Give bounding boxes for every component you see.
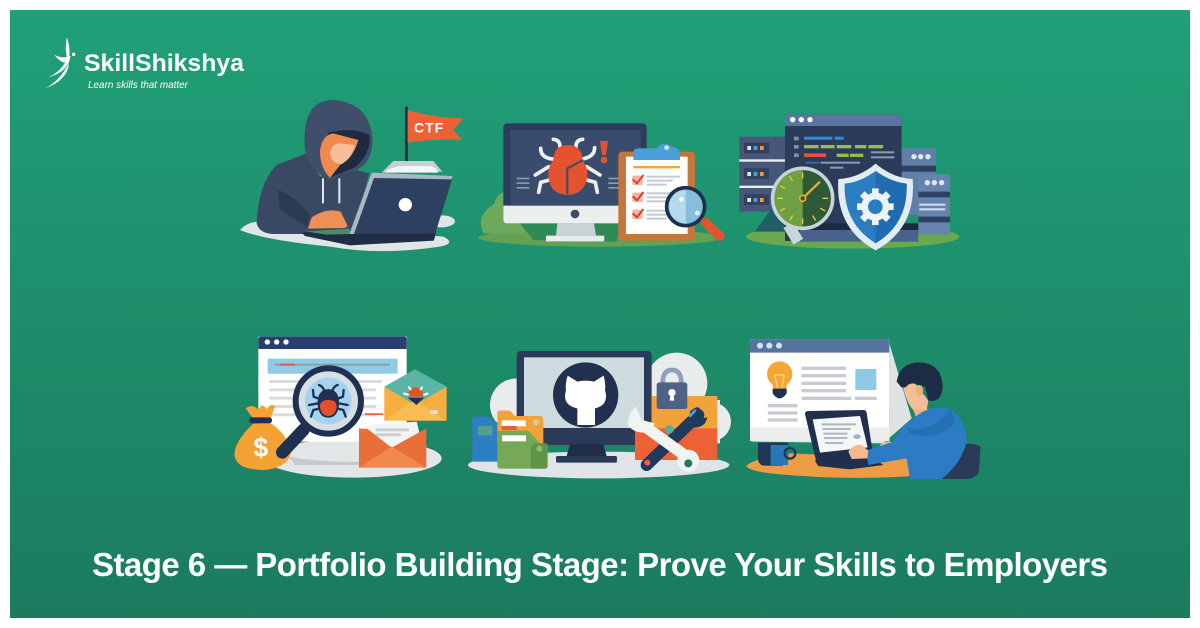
icon: shield with gear: [838, 164, 913, 250]
icon: bug: [535, 139, 608, 195]
clipboard checklist: [618, 144, 695, 241]
server rack: [739, 137, 789, 212]
window shadow: [750, 343, 912, 443]
flag: [405, 107, 463, 162]
folders: [472, 411, 548, 469]
illustration: bug bounty window, money bag and envelopes: [234, 337, 447, 478]
icon: lower envelope: [359, 422, 426, 468]
illustration: bug on monitor with checklist: [478, 123, 722, 247]
illustration: code window, gauge and shield: [739, 114, 959, 250]
hooded figure: [257, 100, 373, 234]
icon: GitHub octocat: [553, 362, 618, 428]
icon: leaping figure: [44, 37, 75, 89]
illustration: developer at laptop with browser window: [746, 339, 981, 479]
cloud: [490, 353, 731, 443]
icon: money bag: $: [253, 433, 268, 463]
icon: crossed wrenches: [628, 407, 707, 472]
icon: magnifying glass with bug: [282, 368, 361, 452]
icon: magnifying glass: [667, 188, 720, 236]
logo: SkillShikshya: [44, 37, 244, 91]
illustration: GitHub monitor with tools: [468, 351, 731, 478]
icon: open envelope with bug: [384, 369, 447, 421]
laptop: [302, 173, 453, 245]
right servers: [897, 148, 950, 234]
icon: gauge magnifier: [773, 168, 833, 242]
logo tagline: Learn skills that matter: [88, 79, 188, 91]
logo wordmark: SkillShikshya: [84, 50, 244, 77]
browser window: [750, 339, 889, 441]
flag: CTF: [414, 119, 444, 135]
person: [848, 362, 981, 479]
coffee mug: [758, 443, 795, 466]
browser window: [258, 337, 407, 442]
laptop: [805, 410, 883, 469]
monitor: [503, 123, 647, 241]
monitor: [517, 351, 652, 463]
icon: money bag: [234, 405, 291, 470]
code window: [785, 114, 918, 242]
illustration: hacker with CTF flag: [240, 100, 463, 251]
table: [746, 453, 913, 478]
lock on toolbox: [635, 370, 717, 460]
icon: light bulb: [767, 361, 792, 398]
title: Stage 6 — Portfolio Building Stage: Prove Your Skills to Employers: [92, 546, 1108, 583]
